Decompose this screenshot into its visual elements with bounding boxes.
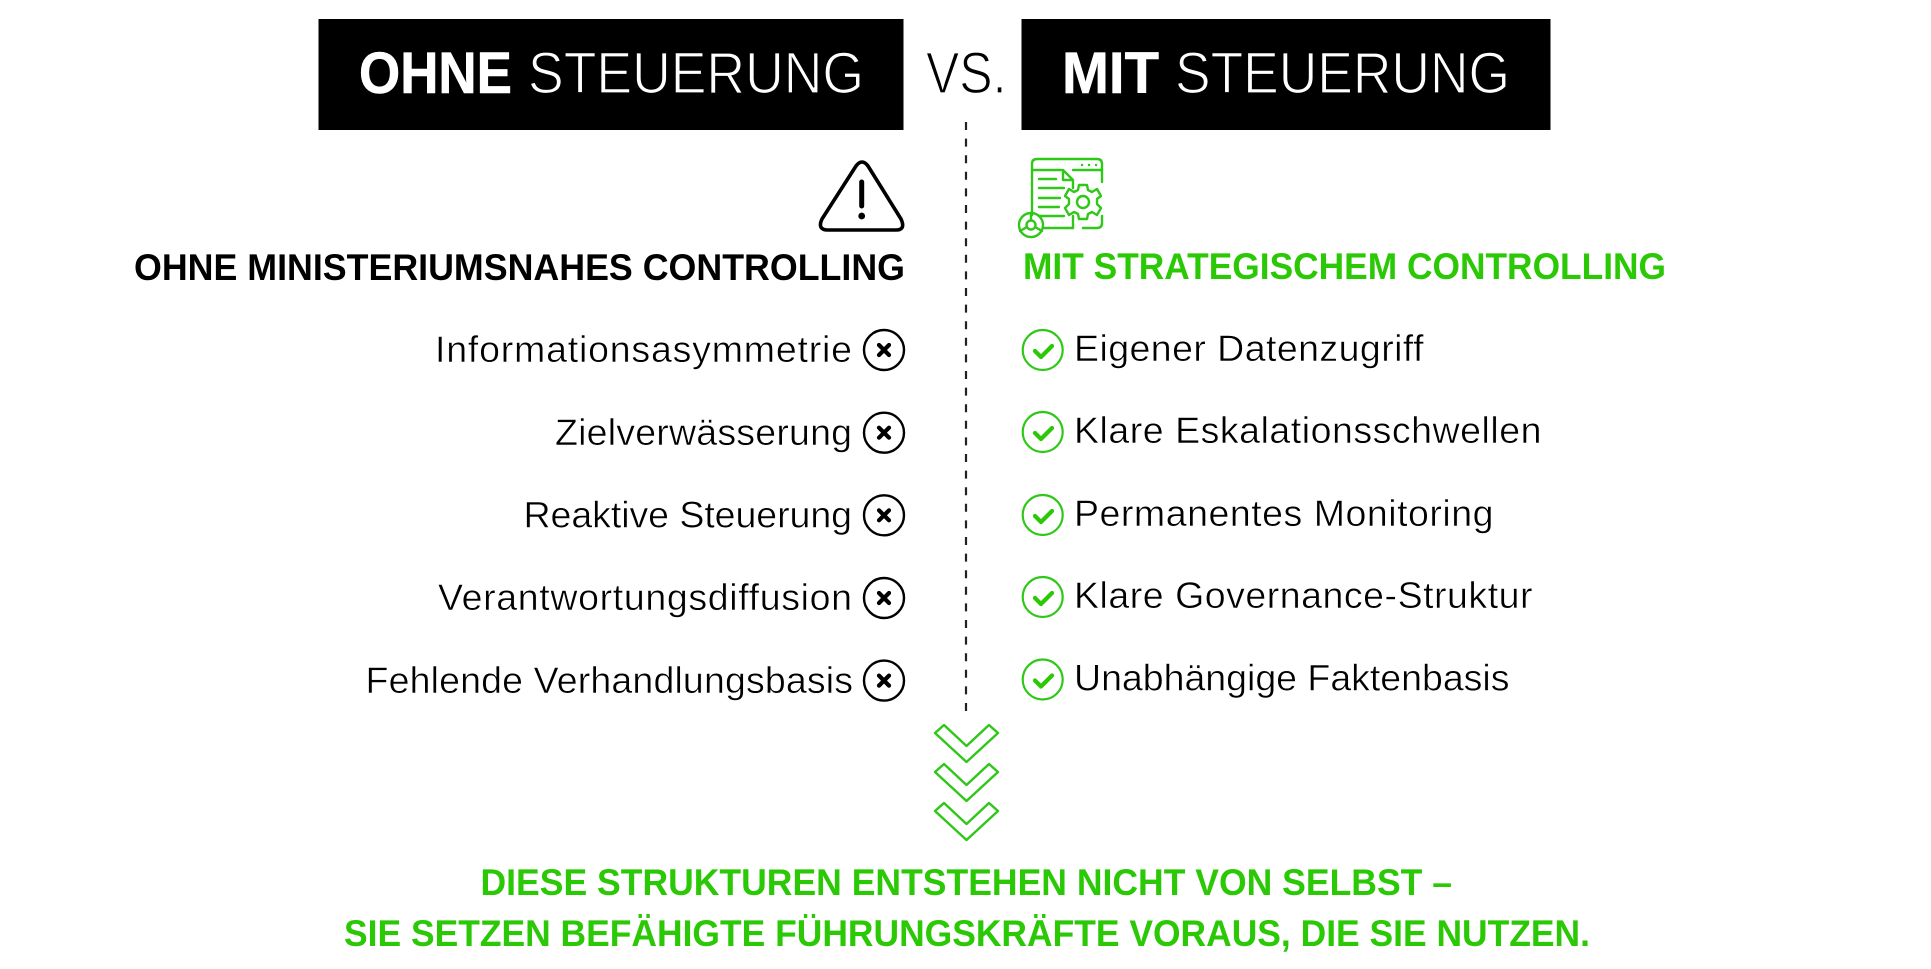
header: mit steuerung <box>1022 19 1550 130</box>
conclusion text <box>344 862 1590 954</box>
header: ohne steuerung: OHNE <box>359 41 512 106</box>
list item: unabhängige faktenbasis: Unabhängige Faktenbasis <box>1074 656 1510 698</box>
list item: reaktive steuerung: Reaktive Steuerung <box>524 494 852 536</box>
conclusion text: SIE SETZEN BEFÄHIGTE FÜHRUNGSKRÄFTE VORAUS, DIE SIE NUTZEN. <box>344 913 1590 954</box>
list item: eigener datenzugriff: Eigener Datenzugriff <box>1074 327 1424 369</box>
list item: klare governance-struktur: Klare Governance-Struktur <box>1074 574 1532 616</box>
list item: zielverwässerung: Zielverwässerung <box>555 411 852 453</box>
list item: permanentes monitoring: Permanentes Monitoring <box>1074 492 1494 534</box>
header: mit steuerung: STEUERUNG <box>1175 41 1510 106</box>
panel: ohne ministeriumsnahes controlling <box>134 162 905 701</box>
icon: document with gear <box>1019 159 1102 237</box>
list item: informationsasymmetrie: Informationsasymmetrie <box>435 328 852 370</box>
header: ohne steuerung: STEUERUNG <box>528 41 864 106</box>
list item: fehlende verhandlungsbasis: Fehlende Verhandlungsbasis <box>366 659 853 701</box>
versus label: VS. <box>926 41 1006 106</box>
panel: mit strategischem controlling <box>1019 159 1666 700</box>
conclusion text: DIESE STRUKTUREN ENTSTEHEN NICHT VON SELBST – <box>480 862 1452 903</box>
list item: klare eskalationsschwellen: Klare Eskalationsschwellen <box>1074 409 1542 451</box>
heading: mit strategischem controlling: MIT STRATEGISCHEM CONTROLLING <box>1023 246 1666 287</box>
list item: verantwortungsdiffusion: Verantwortungsdiffusion <box>438 576 852 618</box>
header: ohne steuerung <box>318 19 904 130</box>
icon: warning triangle <box>820 162 903 230</box>
header: mit steuerung: MIT <box>1062 41 1159 106</box>
icon: triple chevron arrow <box>935 725 998 840</box>
heading: ohne ministeriumsnahes controlling: OHNE MINISTERIUMSNAHES CONTROLLING <box>134 247 905 288</box>
